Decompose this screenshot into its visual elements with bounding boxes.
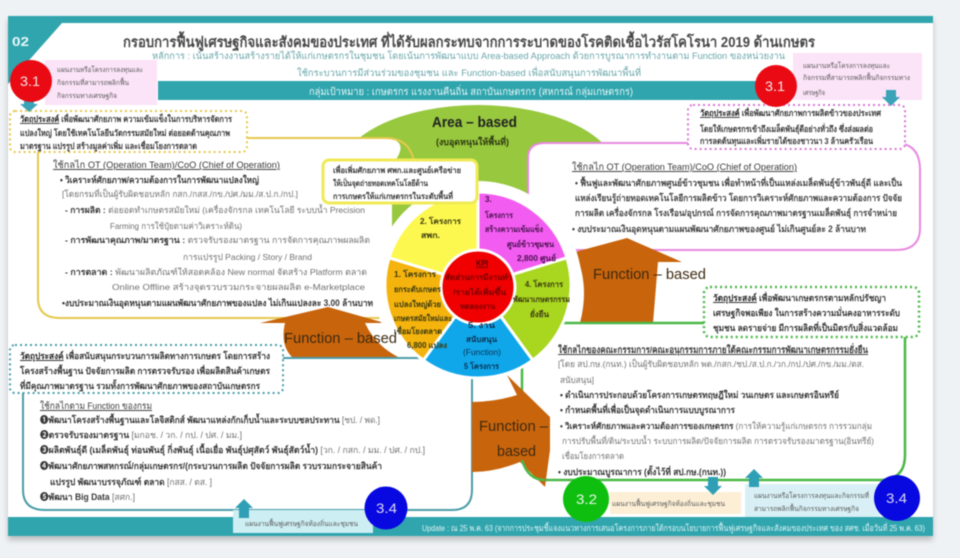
badge: 3.1 left: 3.1: [20, 73, 40, 89]
note: light blue right: แผนงานหรือโครงการลงทุนและกิจกรรมที่: [754, 491, 869, 500]
label: function-based bottom: based: [497, 443, 536, 460]
icon: arrow up left: [235, 499, 253, 518]
text: yellow panel body: [โดยกรมที่เป็นผู้รับผิดชอบหลัก กสก./กสส./กข./ปศ./มม./ส.ป.ก./กป.]: [62, 188, 298, 200]
pie label: KPI: [445, 259, 512, 311]
pie label: 2: [420, 216, 462, 240]
note: peach: [610, 492, 741, 514]
callout: objective green dotted: ชุมชน ลดรายจ่าย มีการผลิตที่เป็นมิตรกับสิ่งแวดล้อม: [713, 321, 898, 334]
callout: objective teal dotted: ที่มีคุณภาพมาตรฐาน รวมทั้งการพัฒนาศักยภาพของสถาบันเกษตรกร: [20, 379, 260, 392]
subtitle: หลักการ : เน้นสร้างงานสร้างรายได้ให้แก่เกษตรกรในชุมชน โดยเน้นการพัฒนาแบบ Area-based Approach ด้วยการบูรณาการทำงานตาม Function ของหน่วยงาน: [152, 50, 785, 62]
icon: arrow up green panel: [745, 469, 763, 487]
text: teal panel body: ➎พัฒนา Big Data [สศก.]: [40, 492, 135, 502]
arrow: function-based centre: [260, 307, 398, 357]
callout: objective pink dotted: การลดต้นทุนและเพิ่มรายได้ของชาวนา 3 ล้านครัวเรือน: [700, 134, 873, 147]
text: pink panel body: • ฟื้นฟูและพัฒนาศักยภาพศูนย์ข้าวชุมชน เพื่อทำหน้าที่เป็นแหล่งเมล็ดพันธุ์ข้าวพันธุ์ดี และเป็น: [575, 176, 903, 189]
pie label: 2: 2. โครงการ: [420, 216, 462, 226]
text: green panel body: [โดย สป.กษ.(กนท.) เป็นผู้รับผิดชอบหลัก พด./กสก./ชป./ส.ป.ก./วก./กป./ปศ./กข./มม./ตส.: [558, 358, 864, 370]
text: yellow panel body: - การตลาด : พัฒนาผลิตภัณฑ์ให้สอดคล้อง New normal จัดสร้าง Platform ตลาด: [65, 267, 367, 277]
text: yellow panel body: - การพัฒนาคุณภาพ/มาตรฐาน : ตรวจรับรองมาตรฐาน การจัดการคุณภาพผลผลิต: [65, 235, 370, 246]
corner tab with page number: 02: [12, 34, 29, 49]
text: yellow panel body: ใช้กลไก OT (Operation Team)/CoO (Chief of Operation): [53, 159, 280, 171]
note: pink left: [45, 60, 157, 105]
badge: 3.1 left: [10, 60, 52, 102]
pie label: 3: 2,800 ศูนย์: [517, 253, 556, 264]
callout: yellow box สพก.: [323, 160, 477, 203]
pie label: 1: เชื่อมโยงตลาด: [394, 325, 442, 336]
text: yellow panel body: Online Offline สร้างจุดรวบรวมกระจายผลผลิต e-Marketplace: [112, 282, 365, 293]
icon: arrow down right: [882, 90, 900, 106]
text: teal panel body: แปรรูป พัฒนาบรรจุภัณฑ์ ตลาด [กสส. / ตส. ]: [50, 476, 212, 488]
callout: objective pink dotted: โดยให้เกษตรกรเข้าถึงเมล็ดพันธุ์ดีอย่างทั่วถึง ซึ่งส่งผลต่อ: [699, 122, 873, 135]
pie label: 2: สพก.: [421, 231, 440, 240]
arrow: function-based bottom: [472, 375, 550, 487]
label: function-based bottom: Function –: [479, 418, 549, 435]
panel: yellow outline: [38, 138, 401, 318]
panel: green outline: [522, 323, 905, 480]
pie label: 5: 5 โครงการ: [464, 361, 500, 371]
pie label: 3: โครงการ: [484, 210, 514, 220]
note: peach: แผนงานฟื้นฟูเศรษฐกิจท้องถิ่นและชุมชน: [612, 497, 725, 508]
pie label: 1: เกษตรสมัยใหม่และ: [394, 313, 452, 323]
callout: objective green dotted: วัตถุประสงค์ เพื่อพัฒนาเกษตรกรตามหลักปรัชญา: [713, 291, 886, 304]
badge: 3.2: [563, 476, 609, 522]
callout: objective yellow dotted: มาตรฐาน แปรรูป สร้างมูลค่าเพิ่ม และเชื่อมโยงการตลาด: [20, 139, 197, 152]
text: pink panel body: แหล่งเรียนรู้ถ่ายทอดเทคโนโลยีการผลิตข้าว โดยการวิเคราะห์ศักยภาพและความต้องการ ปัจจัย: [575, 192, 902, 204]
badge: 3.1 right: [755, 65, 797, 107]
text: yellow panel body: การแปรรูป Packing / Story / Brand: [183, 252, 312, 263]
badge: 3.4 left: [364, 486, 408, 530]
corner tab with page number: [8, 23, 62, 84]
text: yellow panel body: [53, 159, 373, 309]
subtitle: ใช้กระบวนการมีส่วนร่วมของชุมชน และ Function-based เพื่อสนับสนุนการพัฒนาพื้นที่: [297, 66, 641, 79]
pie label: 1: 1. โครงการ: [394, 269, 437, 279]
callout: objective teal dotted: วัตถุประสงค์ เพื่อสนับสนุนกระบวนการผลิตทางการเกษตร โดยการสร้าง: [20, 349, 270, 362]
pie chart: [385, 192, 571, 378]
title: กรอบการฟื้นฟูเศรษฐกิจและสังคมของประเทศ ที่ได้รับผลกระทบจากการระบาดของโรคติดเชื้อไวรัสโคโรนา 2019 ด้านเกษตร: [123, 31, 815, 52]
pie label: 4: 4. โครงการ: [525, 279, 564, 289]
text: yellow panel body: •งบประมาณเงินอุดหนุนตามแผนพัฒนาศักยภาพของแปลง ไม่เกินแปลงละ 3.00 ล้านบาท: [62, 297, 373, 309]
text: teal panel body: ใช้กลไกตาม Function ของกรม: [40, 400, 152, 412]
text: green panel body: • กำหนดพื้นที่เพื่อเป็นจุดดำเนินการแบบบูรณาการ: [560, 403, 735, 416]
target group bar: [158, 81, 768, 100]
note: light blue left: [233, 510, 373, 533]
area-based dome: Area – based: [432, 114, 517, 131]
text: teal panel body: ➋ตรวจรับรองมาตรฐาน [มกอช. / วก. / กป. / ปศ. / มม.]: [40, 430, 242, 441]
badge: 3.1 right: 3.1: [765, 78, 785, 94]
callout: objective yellow dotted: วัตถุประสงค์ เพื่อพัฒนาศักยภาพ ความเข้มแข็งในการบริหารจัดการ: [20, 112, 232, 125]
text: green panel body: • ดำเนินการประกอบด้วยโครงการเกษตรทฤษฎีใหม่ วนเกษตร และเกษตรอินทรีย์: [560, 389, 839, 400]
callout: objective green dotted: เศรษฐกิจพอเพียง ในการสร้างความมั่นคงอาหารระดับ: [713, 306, 900, 319]
pie label: 1: [394, 269, 452, 350]
text: pink panel body: ใช้กลไก OT (Operation Team)/CoO (Chief of Operation): [572, 161, 797, 173]
badge: 3.4 right: [874, 475, 920, 521]
panel: teal outline: [23, 358, 472, 510]
pie label: 5: สนับสนุน: [466, 335, 498, 345]
note: light blue right: สามารถพลิกฟื้นกิจกรรมทางเศรษฐกิจ: [754, 502, 859, 513]
label: function-based right: Function – based: [593, 266, 706, 283]
text: green panel body: เชื่อมโยงการตลาด: [562, 450, 624, 461]
callout: objective yellow dotted: [10, 111, 247, 152]
callout: objective pink dotted: วัตถุประสงค์ เพื่อพัฒนาศักยภาพการผลิตข้าวของประเทศ: [700, 106, 882, 119]
pie label: KPI: สัดส่วนการมีงานทำ: [445, 272, 512, 282]
panel: pink outline: [528, 143, 920, 250]
text: green panel body: • วิเคราะห์ศักยภาพและความต้องการของเกษตรกร (การให้ความรู้แก่เกษตรกร การรวมกลุ่ม: [560, 421, 872, 432]
note: pink left: แผนงานหรือโครงการลงทุนและ: [57, 65, 143, 74]
pie label: 5: (Function): [463, 348, 501, 357]
note: light blue right: [745, 484, 880, 517]
callout: yellow box สพก.: ให้เป็นจุดถ่ายทอดเทคโนโลยีด้าน: [333, 177, 428, 189]
callout: objective teal dotted: [10, 345, 283, 393]
label: function-based bottom: [479, 418, 549, 460]
badge: 3.2: 3.2: [576, 491, 597, 507]
white ring around pie: [374, 181, 582, 389]
pie label: KPI: ทดลองงาน: [460, 302, 495, 311]
badge: 3.4 right: 3.4: [886, 490, 907, 506]
top bar: [8, 16, 933, 23]
pie label: 3: สร้างความเข้มแข็ง: [485, 223, 543, 234]
pie label: 3: ศูนย์ข้าวชุมชน: [507, 239, 554, 250]
badge: 3.4 left: 3.4: [376, 500, 397, 516]
target group bar: กลุ่มเป้าหมาย : เกษตรกร แรงงานคืนถิ่น สถาบันเกษตรกร (สหกรณ์ กลุ่มเกษตรกร): [309, 84, 633, 98]
text: yellow panel body: • วิเคราะห์ศักยภาพ/ความต้องการในการพัฒนาแปลงใหญ่: [60, 174, 259, 186]
note: pink right: เศรษฐกิจ: [803, 89, 825, 97]
subtitle: [152, 50, 785, 79]
text: pink panel body: [572, 161, 903, 235]
note: pink right: กิจกรรมที่สามารถพลิกฟื้นกิจกรรมทาง: [803, 71, 910, 82]
area-based dome: [338, 105, 618, 245]
text: green panel body: • งบประมาณบูรณาการ (ตั้งไว้ที่ สป.กษ.(กนท.)): [558, 465, 726, 478]
pie label: 4: ยั่งยืน: [530, 308, 550, 319]
bottom bar: [8, 517, 933, 536]
text: pink panel body: การผลิต เครื่องจักรกล โรงเรือน/อุปกรณ์ การจัดการคุณภาพมาตรฐานเมล็ดพันธุ์ การจำหน่าย: [575, 206, 897, 219]
note: pink right: แผนงานหรือโครงการลงทุนและ: [803, 61, 890, 70]
icon: arrow down left: [20, 94, 38, 112]
pie label: 1: แปลงใหญ่ด้วย: [394, 299, 441, 310]
icon: arrow down green panel: [704, 477, 722, 495]
text: teal panel body: [40, 400, 425, 502]
text: yellow panel body: - การผลิต : ต่อยอดทำเกษตรสมัยใหม่ (เครื่องจักรกล เทคโนโลยี ระบบน้ำ Precision: [65, 204, 365, 215]
pie label: KPI: /รายได้เพิ่มขึ้น: [453, 286, 507, 297]
pie label: 3: 3.: [485, 195, 492, 204]
pie label: 1: ยกระดับเกษตร: [394, 285, 442, 294]
arrow: function-based right: [575, 238, 682, 323]
note: pink right: [793, 53, 922, 100]
text: green panel body: ใช้กลไกของคณะกรรมการ/คณะอนุกรรมการภายใต้คณะกรรมการพัฒนาเกษตรกรรมยั่งยืน: [558, 342, 868, 356]
note: light blue left: แผนงานฟื้นฟูเศรษฐกิจท้องถิ่นและชุมชน: [245, 517, 358, 528]
text: green panel body: การปรับพื้นที่/ดิน/ระบบน้ำ ระบบการผลิต/ปัจจัยการผลิต การตรวจรับรองมาตรฐาน(อินทรีย์): [562, 435, 874, 447]
pie label: 3: [484, 195, 556, 264]
text: yellow panel body: Farming การใช้ปุ๋ยตามค่าวิเคราะห์ดิน): [110, 221, 242, 232]
note: pink left: กิจกรรมที่สามารถพลิกฟื้น: [57, 76, 129, 87]
callout: yellow box สพก.: เพื่อเพิ่มศักยภาพ ศพก.และศูนย์เครือข่าย: [333, 164, 461, 176]
label: function-based centre: Function – based: [284, 330, 397, 347]
note: pink left: กิจกรรมทางเศรษฐกิจ: [57, 92, 117, 100]
pie label: 1: 6,800 แปลง: [407, 341, 447, 350]
text: teal panel body: ➍พัฒนาศักยภาพสหกรณ์/กลุ่มเกษตรกร/(กระบวนการผลิต ปัจจัยการผลิต รวบรวมกระจายสินค้า: [40, 460, 382, 472]
callout: objective green dotted: [704, 287, 919, 337]
callout: yellow box สพก.: การเกษตรให้แก่เกษตรกรในระดับพื้นที่: [333, 190, 453, 201]
pie label: 4: พัฒนาเกษตรกรรม: [513, 295, 570, 304]
text: teal panel body: ➊พัฒนาโครงสร้างพื้นฐานและโลจิสติกส์ พัฒนาแหล่งกักเก็บน้ำและระบบชลประทาน [ชป. / พด.]: [40, 413, 380, 426]
callout: objective pink dotted: [688, 105, 905, 149]
pie label: KPI: KPI: [476, 259, 488, 268]
text: pink panel body: • งบประมาณเงินอุดหนุนตามแผนพัฒนาศักยภาพของศูนย์ ไม่เกินศูนย์ละ 2 ล้านบาท: [572, 223, 866, 235]
text: teal panel body: ➌ผลิตพันธุ์ดี (เมล็ดพันธุ์ ท่อนพันธุ์ กิ่งพันธุ์ เนื้อเยื่อ พันธุ์ปศุสัตว์ พันธุ์สัตว์น้ำ) [วก. / กสก. / มม. / ปศ. / กป.]: [40, 443, 425, 456]
pie label: 4: [513, 279, 570, 319]
callout: objective teal dotted: โครงสร้างพื้นฐาน ปัจจัยการผลิต การตรวจรับรอง เพื่อผลิตสินค้าเกษตร: [19, 364, 270, 377]
callout: objective yellow dotted: แปลงใหญ่ โดยใช้เทคโนโลยีนวัตกรรมสมัยใหม่ ต่อยอดด้านคุณภาพ: [20, 128, 230, 139]
text: green panel body: สนับสนุน]: [560, 375, 594, 386]
pie label: 5: [463, 321, 501, 371]
text: green panel body: [558, 342, 874, 478]
area-based dome: (งบอุดหนุนให้พื้นที่): [436, 135, 509, 148]
pie label: 5: 5. งาน: [468, 321, 496, 330]
